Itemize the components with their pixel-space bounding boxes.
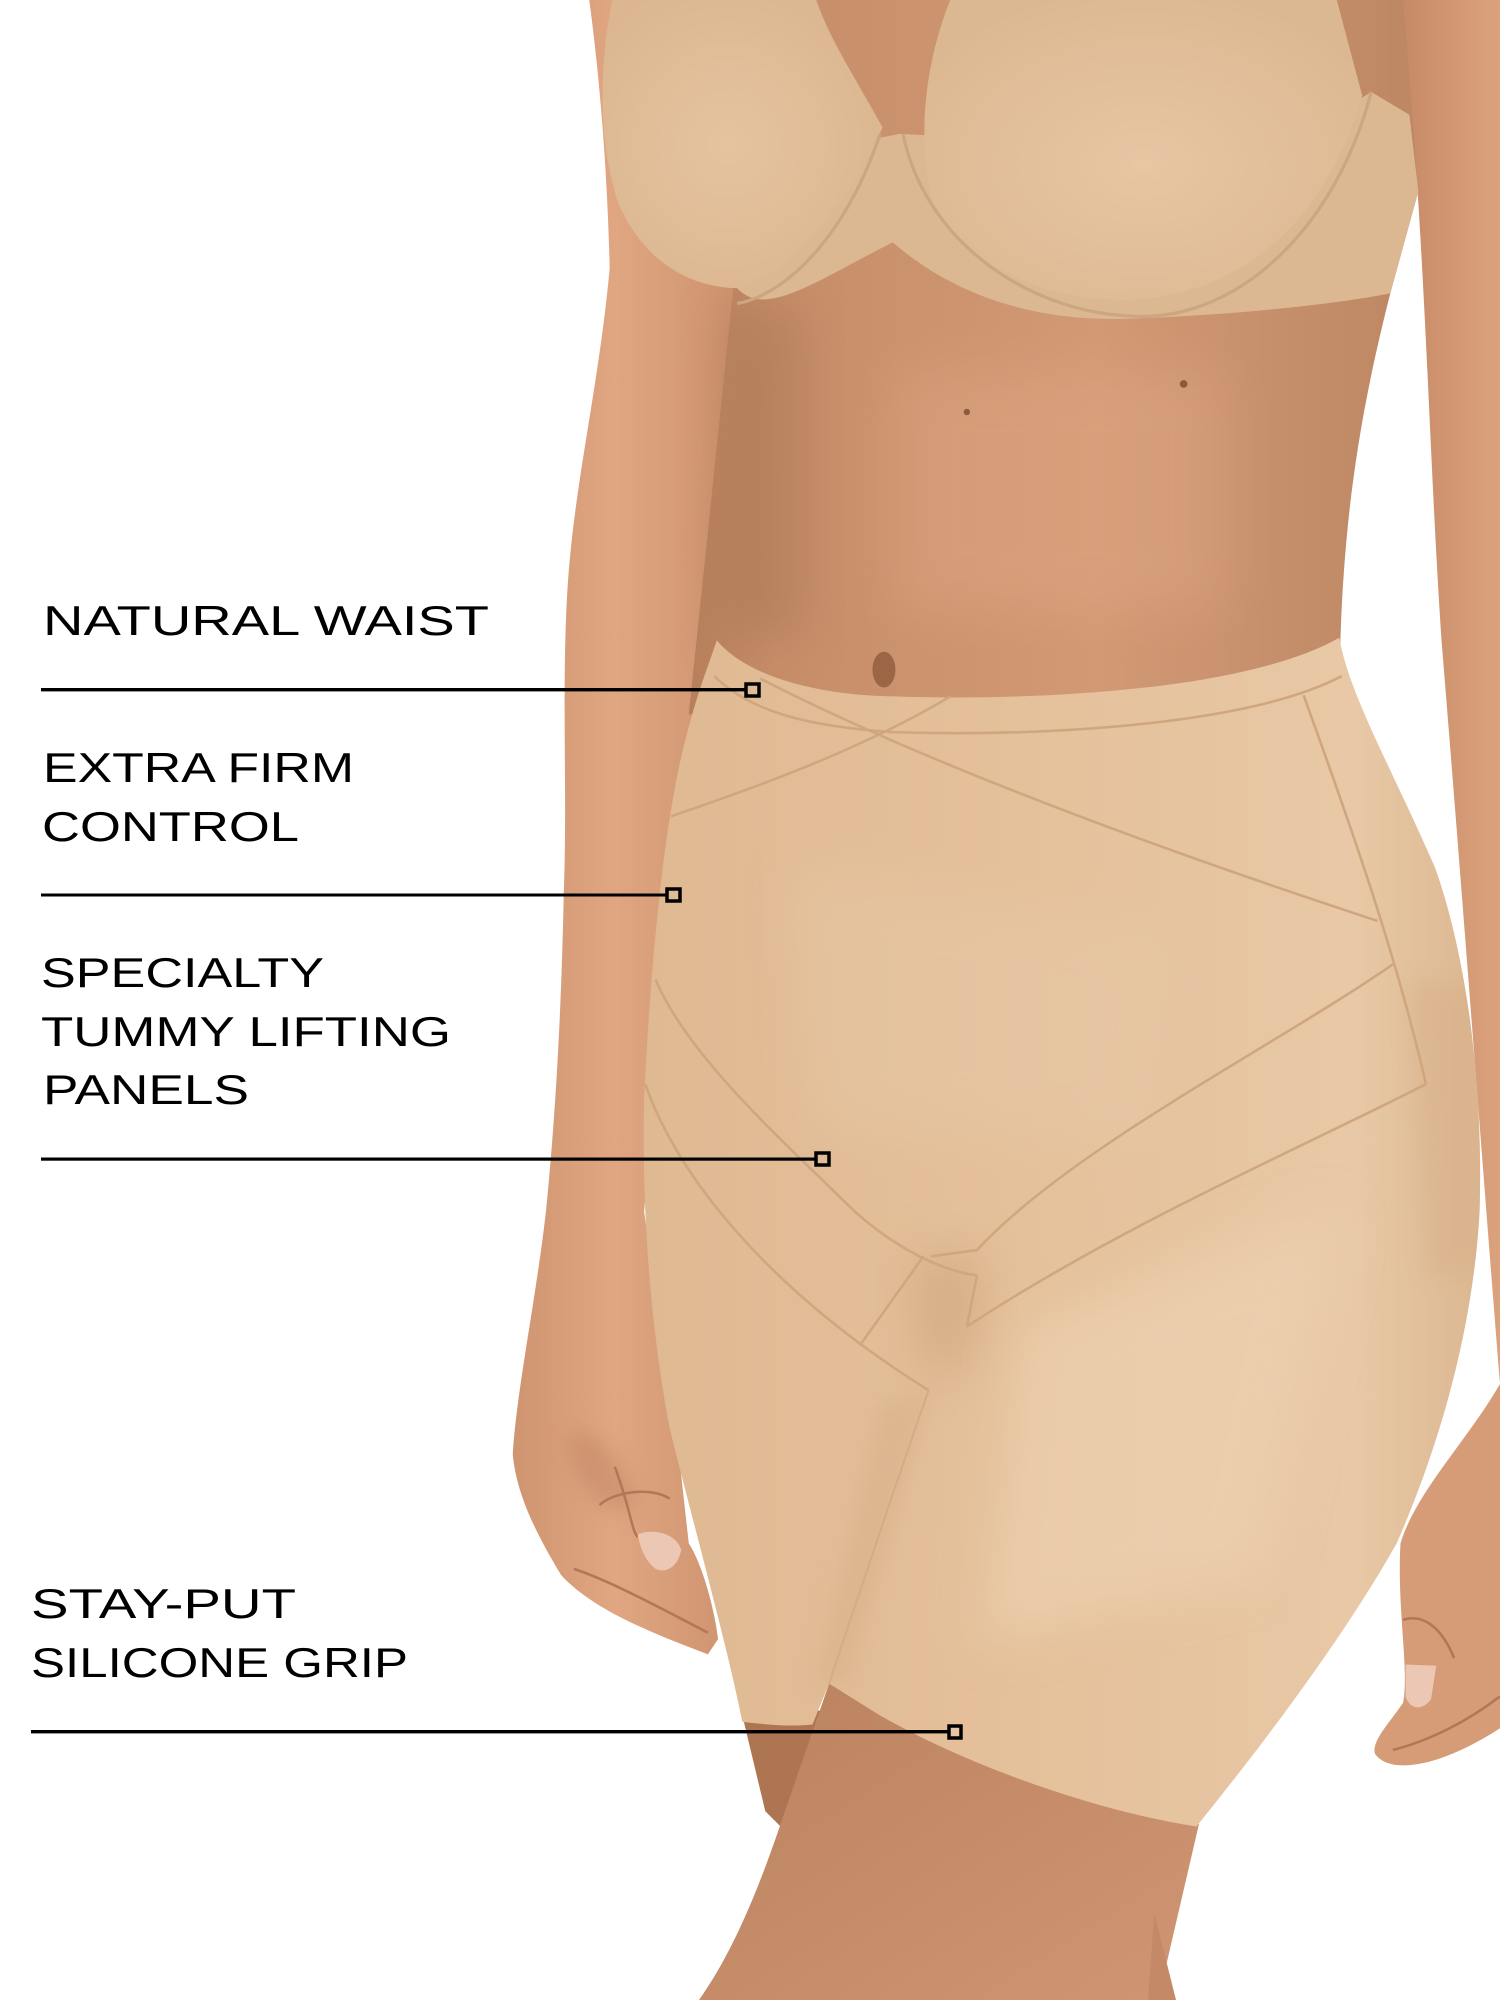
navel — [872, 652, 895, 687]
callout line: extra firm control — [41, 889, 680, 901]
left arm and hand — [513, 0, 765, 1654]
label: stay-put silicone grip: SILICONE GRIP — [31, 1639, 408, 1686]
photo: model wearing shapewear — [513, 0, 1500, 2000]
label: specialty tummy lifting panels: TUMMY LIFTING — [41, 1008, 451, 1055]
inner thigh seam — [829, 1390, 929, 1684]
bra band — [737, 92, 1418, 319]
callout line: silicone grip — [31, 1726, 961, 1738]
thumb nail — [638, 1532, 681, 1570]
label: stay-put silicone grip: STAY-PUT — [31, 1580, 296, 1627]
shapewear shorts — [644, 638, 1492, 1827]
leader lines and markers — [31, 684, 961, 1738]
bra — [602, 0, 1418, 319]
right arm — [1403, 0, 1500, 1384]
label: natural waist: NATURAL WAIST — [43, 597, 489, 644]
bra left cup — [602, 0, 883, 288]
upper torso and abdomen — [612, 0, 1418, 714]
label: extra firm control: CONTROL — [42, 803, 299, 850]
callout line: tummy lifting panels — [41, 1153, 829, 1165]
label: stay-put silicone grip — [31, 1580, 408, 1686]
label: specialty tummy lifting panels: PANELS — [43, 1066, 249, 1113]
label: specialty tummy lifting panels — [41, 949, 451, 1113]
callout line: natural waist — [41, 684, 759, 696]
bra right cup — [924, 0, 1362, 300]
legs — [699, 1684, 1199, 2000]
right hand — [1374, 1384, 1500, 1765]
label: extra firm control — [42, 744, 354, 850]
hand fingers — [574, 1467, 708, 1633]
label: extra firm control: EXTRA FIRM — [43, 744, 354, 791]
seams and tummy panels — [645, 676, 1426, 1390]
label: specialty tummy lifting panels: SPECIALTY — [41, 949, 324, 996]
